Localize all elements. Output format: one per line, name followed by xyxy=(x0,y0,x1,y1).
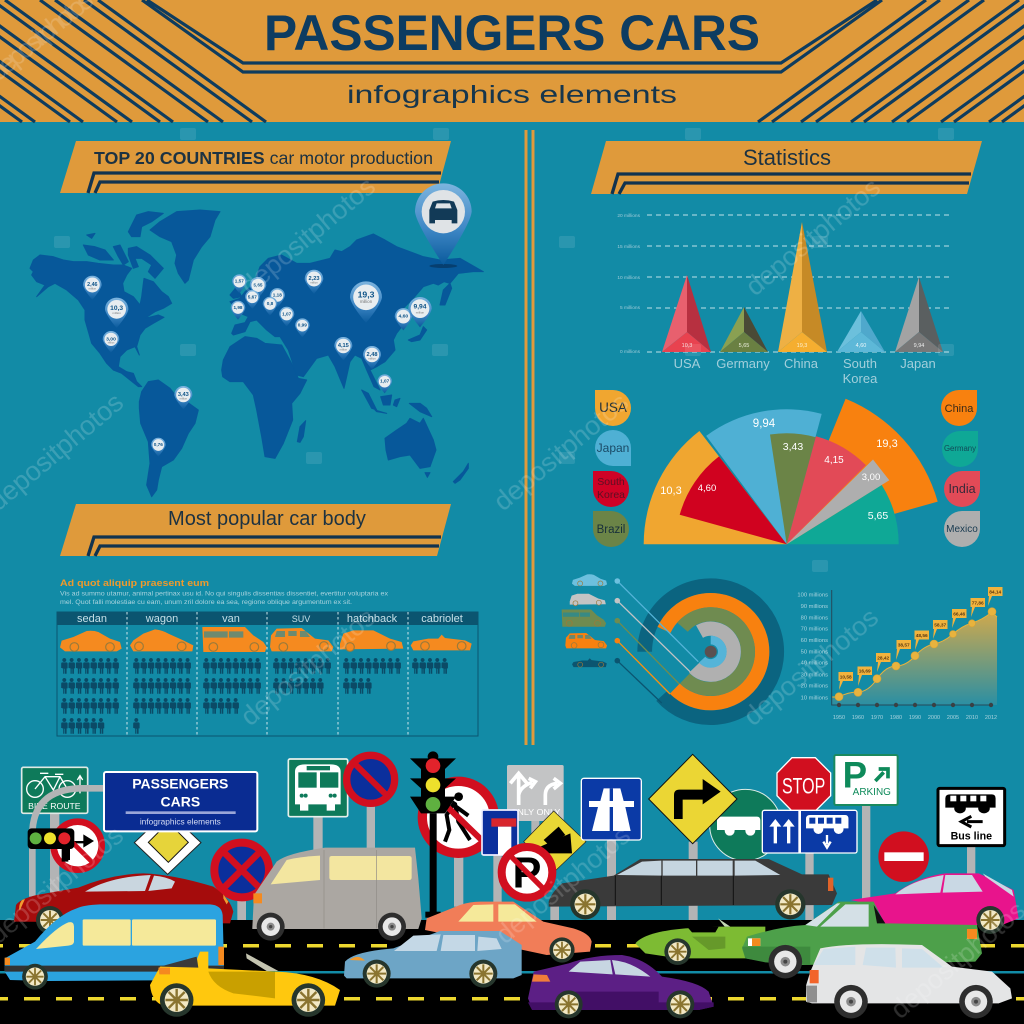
value callouts xyxy=(838,587,1002,690)
pin: 3,00 xyxy=(103,331,119,353)
pin: 4,15: 4,15 xyxy=(338,343,349,349)
sign: no right turn xyxy=(54,822,102,870)
area chart: 58,37 xyxy=(934,622,947,628)
legend Mexico: Mexico xyxy=(946,524,978,535)
sign: bus xyxy=(288,759,348,817)
concentric arcs xyxy=(645,586,777,718)
text block: intro: Ad quot aliquip praesent eum xyxy=(60,578,209,589)
sign: stop: STOP xyxy=(782,773,825,798)
sign: no stopping xyxy=(214,843,269,897)
pin: 2,23: million xyxy=(310,280,318,284)
header diagonal stripes xyxy=(0,0,1024,122)
legend: left xyxy=(593,390,631,547)
column labels: SUV xyxy=(292,614,310,624)
area chart: 38,57 xyxy=(898,642,910,648)
pin: 3,00: 3,00 xyxy=(106,336,116,342)
car: green cabriolet xyxy=(635,918,765,965)
x axis labels: 1980 xyxy=(890,715,902,721)
sign: Passengers Cars: PASSENGERS xyxy=(132,775,228,791)
pin: 10,3: 10,3 xyxy=(110,305,123,312)
y axis labels: 80 millions xyxy=(801,615,828,621)
car: blue van xyxy=(5,904,224,990)
legend South Korea: South xyxy=(597,476,625,488)
wedge values: 4,15 xyxy=(824,455,844,466)
area chart: 16,69 xyxy=(859,668,871,674)
axis labels: 0 millions xyxy=(620,349,641,355)
country labels: Germany xyxy=(716,356,770,371)
x axis dots xyxy=(837,703,993,707)
axis labels: 10 millions xyxy=(617,275,641,281)
y axis labels: 50 millions xyxy=(801,649,828,655)
shadow under big pin xyxy=(429,264,457,268)
legend USA: USA xyxy=(599,400,627,415)
pyramid: Japan xyxy=(895,277,943,352)
pin: 1,18 xyxy=(270,288,285,308)
pin: 2,46 xyxy=(83,276,102,300)
column labels: hatchback xyxy=(347,613,398,625)
donut chart with leaders xyxy=(562,574,777,718)
legend India: India xyxy=(948,482,976,496)
country labels: Korea xyxy=(843,371,878,386)
orange car silhouettes xyxy=(60,627,472,652)
pin: 9,94: million xyxy=(416,310,425,314)
x axis labels: 1990 xyxy=(909,715,921,721)
pin: 9,94 xyxy=(408,297,432,327)
pin: 2,48 xyxy=(363,346,381,369)
pin: 2,23 xyxy=(305,270,323,294)
sign: no parking P: P xyxy=(513,850,541,898)
legend Germany: Germany xyxy=(944,444,976,453)
area chart: 66,46 xyxy=(953,611,966,617)
axis labels: 20 millions xyxy=(617,213,641,219)
wedge: USA xyxy=(644,431,787,544)
leader lines xyxy=(617,581,698,703)
arm post xyxy=(32,788,103,897)
centre divider xyxy=(524,130,534,745)
pin: 3,43: 3,43 xyxy=(178,392,189,398)
posts xyxy=(50,807,502,920)
sign: lane only xyxy=(507,765,564,821)
wedge values: 3,00 xyxy=(862,472,880,483)
pin: 1,07 xyxy=(377,374,392,393)
sign: parking xyxy=(834,755,898,805)
axis labels xyxy=(617,213,641,355)
pin: 9,94: 9,94 xyxy=(414,304,427,311)
y axis labels: 90 millions xyxy=(801,604,828,610)
y axis labels: 60 millions xyxy=(801,638,828,644)
pin: 0,8 xyxy=(263,297,277,316)
y axis labels: 30 millions xyxy=(801,672,828,678)
car: red sedan xyxy=(14,873,233,934)
y axis labels: 40 millions xyxy=(801,660,828,666)
legend China: China xyxy=(945,403,974,415)
pin: 10,3 xyxy=(105,298,128,328)
pin: 1,57: 1,57 xyxy=(235,279,244,284)
pin: 1,98 xyxy=(231,301,245,320)
wedge: Brazil xyxy=(770,433,816,544)
pin: 4,60: 4,60 xyxy=(398,314,408,320)
wedge: China xyxy=(787,399,938,544)
legend South Korea: Korea xyxy=(597,489,625,501)
wedge: Mexico xyxy=(787,460,889,544)
pin: 0,76: 0,76 xyxy=(154,442,163,447)
heading: top 20 countries: TOP 20 COUNTRIES car motor production xyxy=(94,148,433,168)
car: grey van xyxy=(252,848,422,941)
y axis labels: 10 millions xyxy=(801,695,828,701)
watermarks: depositphotos xyxy=(235,602,381,732)
area chart: 77,86 xyxy=(972,600,984,606)
text block: intro: mel. Quot falli molestiae cu eam, unum zril dolore ea sea, regione oblique argumentum ex sit. xyxy=(60,599,352,606)
pin: 4,15: million xyxy=(340,347,348,351)
sign: parking: ARKING xyxy=(853,787,891,798)
sign: parking: P xyxy=(843,755,867,796)
pyramid: South Korea: 4,60 xyxy=(856,343,866,349)
sign: bike route: BIKE ROUTE xyxy=(28,801,81,811)
title: PASSENGERS CARS xyxy=(264,5,760,61)
y axis labels: 20 millions xyxy=(801,684,828,690)
wedge values: 9,94 xyxy=(753,418,776,430)
wedge values: 4,60 xyxy=(698,483,716,494)
country labels: USA xyxy=(674,356,701,371)
x axis labels: 2012 xyxy=(985,715,997,721)
header banner xyxy=(0,0,1024,122)
pin: 2,46: million xyxy=(89,286,97,290)
sign: no through road xyxy=(482,810,518,855)
pin: 5,67: 5,67 xyxy=(248,294,257,299)
pin: 19,3: million xyxy=(360,299,373,304)
pin: 2,48: 2,48 xyxy=(366,352,378,358)
x axis labels: 1960 xyxy=(852,715,864,721)
x axis labels xyxy=(833,715,997,721)
country labels: Japan xyxy=(900,356,936,371)
x axis labels: 1970 xyxy=(871,715,883,721)
column labels: cabriolet xyxy=(421,613,463,625)
legend Japan xyxy=(595,430,631,466)
cars: front row left xyxy=(5,904,522,1017)
pin: 1,07: 1,07 xyxy=(282,311,292,316)
pins with values xyxy=(83,270,432,457)
wedge values: 10,3 xyxy=(660,485,682,497)
pin: 1,18: 1,18 xyxy=(273,293,282,298)
sign: bus line xyxy=(938,788,1005,846)
heading: most popular car body xyxy=(60,504,451,556)
sign: Passengers Cars xyxy=(104,772,257,831)
watermarks: depositphotos xyxy=(488,387,634,517)
legend Japan: Japan xyxy=(597,441,629,455)
wedge: Japan xyxy=(706,409,822,544)
pyramid: USA: 10,3 xyxy=(682,343,692,349)
pin: 0,99 xyxy=(295,318,310,337)
sign: lane only: ONLY ONLY xyxy=(510,807,561,817)
pyramid: USA xyxy=(662,275,711,352)
car: black limousine xyxy=(549,859,837,919)
x axis labels: 1950 xyxy=(833,715,845,721)
area chart: 10,58 xyxy=(840,674,852,680)
map pins xyxy=(83,183,472,457)
pin: 1,98: 1,98 xyxy=(233,305,243,310)
people pictograms xyxy=(61,658,448,734)
wedge: Germany xyxy=(787,485,899,544)
heading: top 20 countries xyxy=(60,141,451,193)
pyramid: Germany xyxy=(720,307,768,352)
americas xyxy=(30,210,220,497)
wedge values xyxy=(660,418,898,522)
car: green pickup xyxy=(742,902,982,978)
x axis labels: 2010 xyxy=(966,715,978,721)
watermarks: depositphotos xyxy=(490,820,636,950)
y axis labels xyxy=(797,592,828,701)
sign: bus lane xyxy=(762,810,857,853)
mini car icons xyxy=(562,574,607,667)
pyramid: Germany: 5,65 xyxy=(739,343,749,349)
car: purple sedan xyxy=(528,955,714,1018)
sign: Passengers Cars: CARS xyxy=(161,794,200,810)
pin: 1,07: 1,07 xyxy=(380,379,390,384)
legend: right xyxy=(941,390,980,547)
sign: yellow turn arrow xyxy=(649,754,737,844)
pyramid chart xyxy=(617,213,953,386)
car: orange sedan xyxy=(425,902,592,963)
pin: 5,65: 5,65 xyxy=(253,282,263,287)
sign: steep grade xyxy=(524,811,586,872)
area chart: 84,14 xyxy=(989,589,1002,595)
pin: 5,67 xyxy=(245,290,260,309)
pin: 0,8: 0,8 xyxy=(267,301,274,306)
cars: front row right xyxy=(528,944,1012,1018)
area chart: 28,42 xyxy=(877,655,890,661)
sign: priority road xyxy=(134,811,201,874)
legend Mexico xyxy=(944,511,980,547)
pyramid: South Korea xyxy=(837,311,885,352)
cars: back row right xyxy=(549,859,1019,978)
axis labels: 15 millions xyxy=(617,244,641,250)
car: pink sedan xyxy=(850,873,1019,934)
posts xyxy=(531,805,975,920)
area chart: 48,56 xyxy=(916,633,928,639)
pin: 4,15 xyxy=(334,337,352,360)
x axis labels: 2000 xyxy=(928,715,940,721)
sign: no parking xyxy=(347,755,395,803)
car: blue-grey wagon xyxy=(344,931,522,988)
heading: statistics xyxy=(591,141,982,194)
area xyxy=(832,612,997,705)
sign: bike route xyxy=(22,767,88,813)
wedge values: 19,3 xyxy=(876,438,898,450)
pin: 10,3: million xyxy=(112,311,121,315)
area chart xyxy=(797,587,1002,721)
sign: Passengers Cars: infographics elements xyxy=(140,816,221,826)
legend South Korea xyxy=(593,471,629,507)
pin: 4,60 xyxy=(395,308,412,330)
horizontal traffic light xyxy=(28,828,74,860)
y axis labels: 100 millions xyxy=(797,592,828,598)
pin: 3,43: million xyxy=(180,396,188,400)
pin: 19,3: 19,3 xyxy=(358,289,375,299)
legend Brazil xyxy=(593,511,629,547)
sign: no parking P xyxy=(502,847,552,898)
column labels xyxy=(77,613,463,625)
wedge: India xyxy=(787,436,866,544)
x axis labels: 2005 xyxy=(947,715,959,721)
pyramid: China xyxy=(778,222,827,352)
wedge values: 5,65 xyxy=(868,510,888,522)
pin: car marker xyxy=(415,183,472,265)
legend Germany xyxy=(942,431,978,467)
watermarks: depositphotos xyxy=(740,172,886,302)
road signs: left part xyxy=(22,751,502,920)
watermarks: depositphotos xyxy=(738,602,884,732)
sign: green bus circle xyxy=(710,789,781,861)
pin: 1,07 xyxy=(279,307,294,326)
column labels: wagon xyxy=(145,613,178,625)
traffic light xyxy=(410,751,456,918)
watermarks: depositphotos xyxy=(235,171,381,301)
road xyxy=(0,920,1024,1024)
sign: motorway xyxy=(581,778,641,840)
pin: 0,76 xyxy=(151,438,166,457)
legend USA xyxy=(595,390,631,426)
country labels: China xyxy=(784,356,819,371)
pyramid: China: 19,3 xyxy=(797,343,807,349)
axis labels: 5 millions xyxy=(620,305,641,311)
sign: stop xyxy=(777,758,831,811)
watermark camera marks xyxy=(54,128,954,572)
text block: intro xyxy=(60,578,389,606)
column labels: sedan xyxy=(77,613,107,625)
heading: most popular car body: Most popular car body xyxy=(168,508,366,530)
car: yellow cabriolet xyxy=(150,952,340,1017)
legend Brazil: Brazil xyxy=(597,524,625,536)
pin: 2,48: million xyxy=(368,356,376,360)
sign: no entry xyxy=(878,831,929,882)
pin: 3,43 xyxy=(174,386,192,409)
pyramid: Japan: 9,94 xyxy=(914,343,924,349)
pin: 2,46: 2,46 xyxy=(87,282,98,288)
pin: 0,99: 0,99 xyxy=(298,323,307,328)
road signs: right part xyxy=(482,754,1005,920)
eurasia, africa, oceania xyxy=(222,234,483,483)
data points xyxy=(835,608,996,701)
sign: bus line: Bus line xyxy=(951,830,992,842)
cars: back row left xyxy=(14,848,592,963)
legend China xyxy=(941,390,977,426)
text block: intro: Vis ad summo utamur, animal pertinax usu id. No qui singulis dissentias dissentiet, evertitur voluptaria ex xyxy=(60,590,389,598)
table: car body popularity xyxy=(57,612,478,736)
y axis labels: 70 millions xyxy=(801,626,828,632)
world map xyxy=(30,183,483,497)
radial wedge chart xyxy=(644,399,938,544)
sign: no pedestrians xyxy=(422,781,494,853)
pin: 5,65 xyxy=(250,277,266,299)
subtitle: infographics elements xyxy=(347,81,677,109)
heading: statistics: Statistics xyxy=(743,145,831,170)
pin: 19,3 xyxy=(350,281,382,323)
country labels xyxy=(674,356,936,386)
country labels: South xyxy=(843,356,877,371)
car: white SUV xyxy=(806,944,1012,1018)
legend India xyxy=(944,471,980,507)
column labels: van xyxy=(222,613,240,625)
pin: 2,23: 2,23 xyxy=(308,276,320,282)
wedge: South Korea xyxy=(680,456,787,544)
pin: 1,57 xyxy=(232,274,247,293)
wedge values: 3,43 xyxy=(783,441,803,453)
pin: 3,00: million xyxy=(108,342,115,344)
